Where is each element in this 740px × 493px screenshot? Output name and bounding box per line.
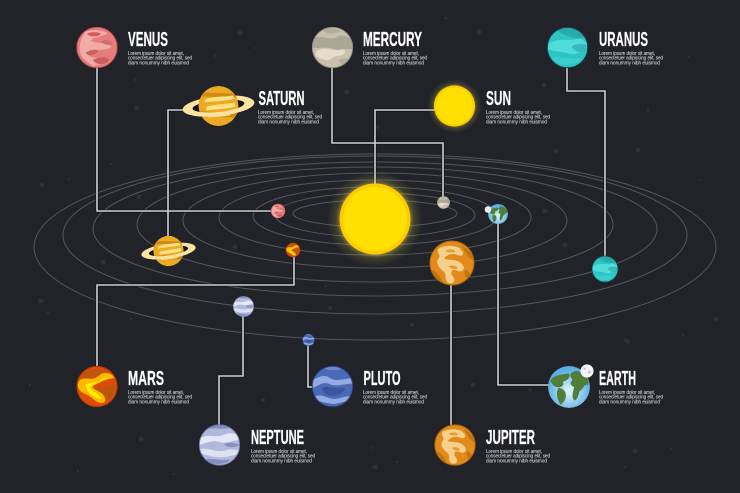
- legend: jupiter: JUPITER: [486, 427, 535, 449]
- legend: mercury: Lorem ipsum dolor sit amet,: [363, 51, 419, 57]
- legend: venus: diam nonummy nibh euismod: [128, 60, 189, 66]
- orbit planet: earth: [485, 204, 508, 224]
- legend: mercury: MERCURY: [363, 29, 422, 51]
- legend: neptune: Lorem ipsum dolor sit amet,: [251, 449, 307, 455]
- legend: sun: Lorem ipsum dolor sit amet,: [486, 110, 542, 116]
- orbit planet: uranus: [592, 256, 618, 282]
- legend: earth: EARTH: [599, 368, 636, 390]
- sun in the centre of the system: [327, 171, 423, 267]
- legend: saturn: Lorem ipsum dolor sit amet,: [258, 110, 314, 116]
- legend: venus: [76, 27, 192, 68]
- legend: earth: diam nonummy nibh euismod: [599, 399, 660, 405]
- legend: mercury: diam nonummy nibh euismod: [363, 60, 424, 66]
- legend: mars: consectetuer adipiscing elit, sed: [128, 395, 192, 401]
- orbits: [34, 154, 716, 340]
- legend: saturn: consectetuer adipiscing elit, sed: [258, 115, 322, 121]
- legend: pluto: diam nonummy nibh euismod: [363, 399, 424, 405]
- legend: uranus: consectetuer adipiscing elit, sed: [599, 56, 663, 62]
- legend: earth: Lorem ipsum dolor sit amet,: [599, 390, 655, 396]
- legend: venus: Lorem ipsum dolor sit amet,: [128, 51, 184, 57]
- legend: neptune: [199, 424, 315, 466]
- legend: sun: consectetuer adipiscing elit, sed: [486, 115, 550, 121]
- legend: neptune: consectetuer adipiscing elit, sed: [251, 454, 315, 460]
- legend: pluto: consectetuer adipiscing elit, sed: [363, 395, 427, 401]
- orbit planet: neptune: [233, 296, 254, 317]
- legend: neptune: diam nonummy nibh euismod: [251, 458, 312, 464]
- legend: venus: VENUS: [128, 29, 168, 51]
- legend: saturn: [180, 80, 322, 132]
- orbit planet: jupiter: [430, 241, 474, 285]
- legend: sun: [428, 79, 550, 133]
- legend: pluto: PLUTO: [364, 368, 400, 390]
- legend: saturn: SATURN: [258, 88, 304, 110]
- legend: mars: diam nonummy nibh euismod: [128, 399, 189, 405]
- legend: neptune: NEPTUNE: [251, 427, 304, 449]
- legend: jupiter: [434, 424, 550, 466]
- legend: pluto: [312, 366, 427, 407]
- legend: mars: Lorem ipsum dolor sit amet,: [128, 390, 184, 396]
- legend: mars: [76, 366, 192, 407]
- legend: mercury: [312, 27, 427, 68]
- orbit planet: mars: [286, 243, 300, 257]
- connector lines: [97, 68, 605, 426]
- orbit planet: mercury: [437, 196, 450, 209]
- orbit planet: pluto: [302, 334, 314, 346]
- legend: jupiter: consectetuer adipiscing elit, sed: [486, 454, 550, 460]
- legend: pluto: Lorem ipsum dolor sit amet,: [363, 390, 419, 396]
- legend: sun: diam nonummy nibh euismod: [486, 119, 547, 125]
- legend: venus: consectetuer adipiscing elit, sed: [128, 56, 192, 62]
- legend: mars: MARS: [128, 368, 164, 390]
- legend: mercury: consectetuer adipiscing elit, sed: [363, 56, 427, 62]
- legend: jupiter: Lorem ipsum dolor sit amet,: [486, 449, 542, 455]
- legend: earth: [548, 364, 663, 408]
- orbit planet: venus: [271, 204, 285, 218]
- legend: jupiter: diam nonummy nibh euismod: [486, 458, 547, 464]
- legend: uranus: URANUS: [599, 29, 648, 51]
- legend: saturn: diam nonummy nibh euismod: [258, 119, 319, 125]
- legend: earth: consectetuer adipiscing elit, sed: [599, 395, 663, 401]
- legend: uranus: diam nonummy nibh euismod: [599, 60, 660, 66]
- legend: sun: SUN: [486, 88, 511, 110]
- legend: uranus: [547, 27, 663, 68]
- legend: uranus: Lorem ipsum dolor sit amet,: [599, 51, 655, 57]
- orbit planet: saturn: [139, 230, 198, 272]
